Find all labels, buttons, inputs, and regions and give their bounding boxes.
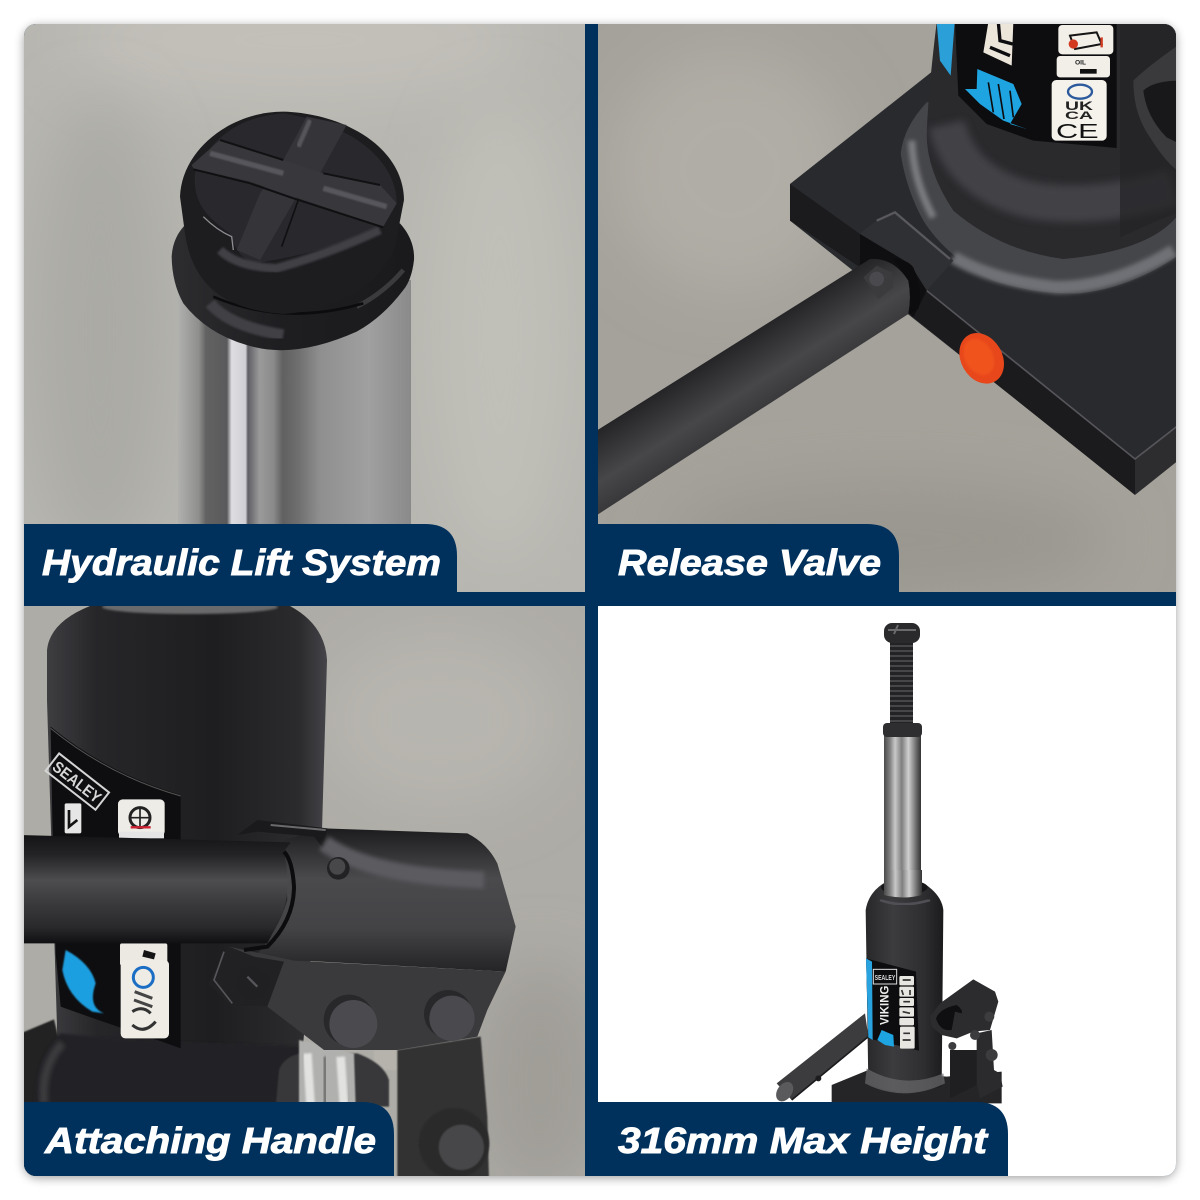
label: 316mm max height xyxy=(585,1102,1008,1176)
icon: oil sticker: OIL xyxy=(1075,60,1086,67)
label: attaching handle: Attaching Handle xyxy=(44,1120,376,1161)
SEALEY label: SEALEY xyxy=(875,973,895,982)
icon: lower stickers xyxy=(120,943,169,1038)
icon: blue ship logo xyxy=(62,950,104,1013)
label: hydraulic lift system: Hydraulic Lift System xyxy=(42,542,441,583)
flat top recess xyxy=(195,113,397,263)
SEALEY label xyxy=(873,969,897,984)
screw thread xyxy=(890,640,913,728)
label: release valve xyxy=(585,524,899,592)
saddle xyxy=(884,623,920,643)
lug xyxy=(1134,47,1176,170)
icon column xyxy=(899,976,915,1049)
base plate xyxy=(790,24,1180,494)
handle tube xyxy=(21,835,291,943)
handle tube xyxy=(593,259,910,517)
clevis xyxy=(930,979,998,1038)
label: hydraulic lift system xyxy=(24,524,457,592)
icon: arrow sticker xyxy=(65,803,81,833)
pump bracket xyxy=(397,1037,489,1180)
horizontal divider xyxy=(24,592,1176,606)
panel: product on white xyxy=(598,606,1176,1176)
jack body xyxy=(927,22,1180,259)
rubber collar xyxy=(172,223,414,350)
blue band xyxy=(866,958,873,1040)
red release plug xyxy=(959,333,1004,384)
icon: UKCA CE sticker: CE xyxy=(1056,120,1099,143)
sticker xyxy=(51,727,181,1048)
lower link xyxy=(209,947,506,1050)
piston xyxy=(299,1040,356,1107)
retaining clip xyxy=(327,857,350,880)
bottle body xyxy=(866,883,943,1093)
handle socket xyxy=(254,828,516,972)
ram collar xyxy=(883,723,922,737)
spare handle tube xyxy=(777,1013,868,1100)
icon: oil sticker xyxy=(1057,56,1110,77)
SEALEY label: SEALEY xyxy=(49,759,104,807)
ram xyxy=(884,730,921,890)
panel: release valve photo xyxy=(593,22,1180,600)
piston ring xyxy=(276,1053,389,1107)
cap xyxy=(180,112,404,314)
bottle body xyxy=(47,606,327,1080)
icon: UKCA CE sticker xyxy=(1052,80,1107,143)
pump link xyxy=(950,1050,978,1098)
label: 316mm max height: 316mm Max Height xyxy=(618,1120,989,1161)
jack foot, drawn at 3x xyxy=(21,1019,489,1180)
icon: viking ship logo xyxy=(965,69,1027,129)
base plate xyxy=(832,1070,1002,1103)
cross ridges xyxy=(237,117,347,260)
sticker xyxy=(866,958,919,1051)
weld flange xyxy=(901,91,1180,293)
VIKING text: VIKING xyxy=(878,986,892,1025)
pump lever, drawn at 3x xyxy=(930,979,1003,1098)
sticker xyxy=(955,22,1117,148)
cap and collar, drawn at 3x xyxy=(172,112,414,350)
panel: hydraulic lift system photo xyxy=(24,0,585,592)
light gap xyxy=(374,1050,401,1070)
icon: UKCA CE sticker: UK xyxy=(1065,99,1094,113)
chrome ram xyxy=(178,280,411,540)
icon: wheel sticker xyxy=(118,799,165,836)
label: attaching handle xyxy=(24,1102,394,1176)
handle pin xyxy=(864,266,886,286)
pivot bolts xyxy=(246,976,474,1048)
label: release valve: Release Valve xyxy=(618,542,881,583)
socket block xyxy=(950,258,954,264)
VIKING lettering xyxy=(983,22,1013,66)
icon: ship logo xyxy=(877,1030,894,1047)
icon: UKCA CE sticker: CA xyxy=(1065,110,1094,122)
weld foot xyxy=(865,1068,945,1093)
icon: blue stripe xyxy=(937,22,955,76)
icon: instruction sticker xyxy=(1058,25,1113,54)
panel: attaching handle photo xyxy=(21,600,610,1200)
